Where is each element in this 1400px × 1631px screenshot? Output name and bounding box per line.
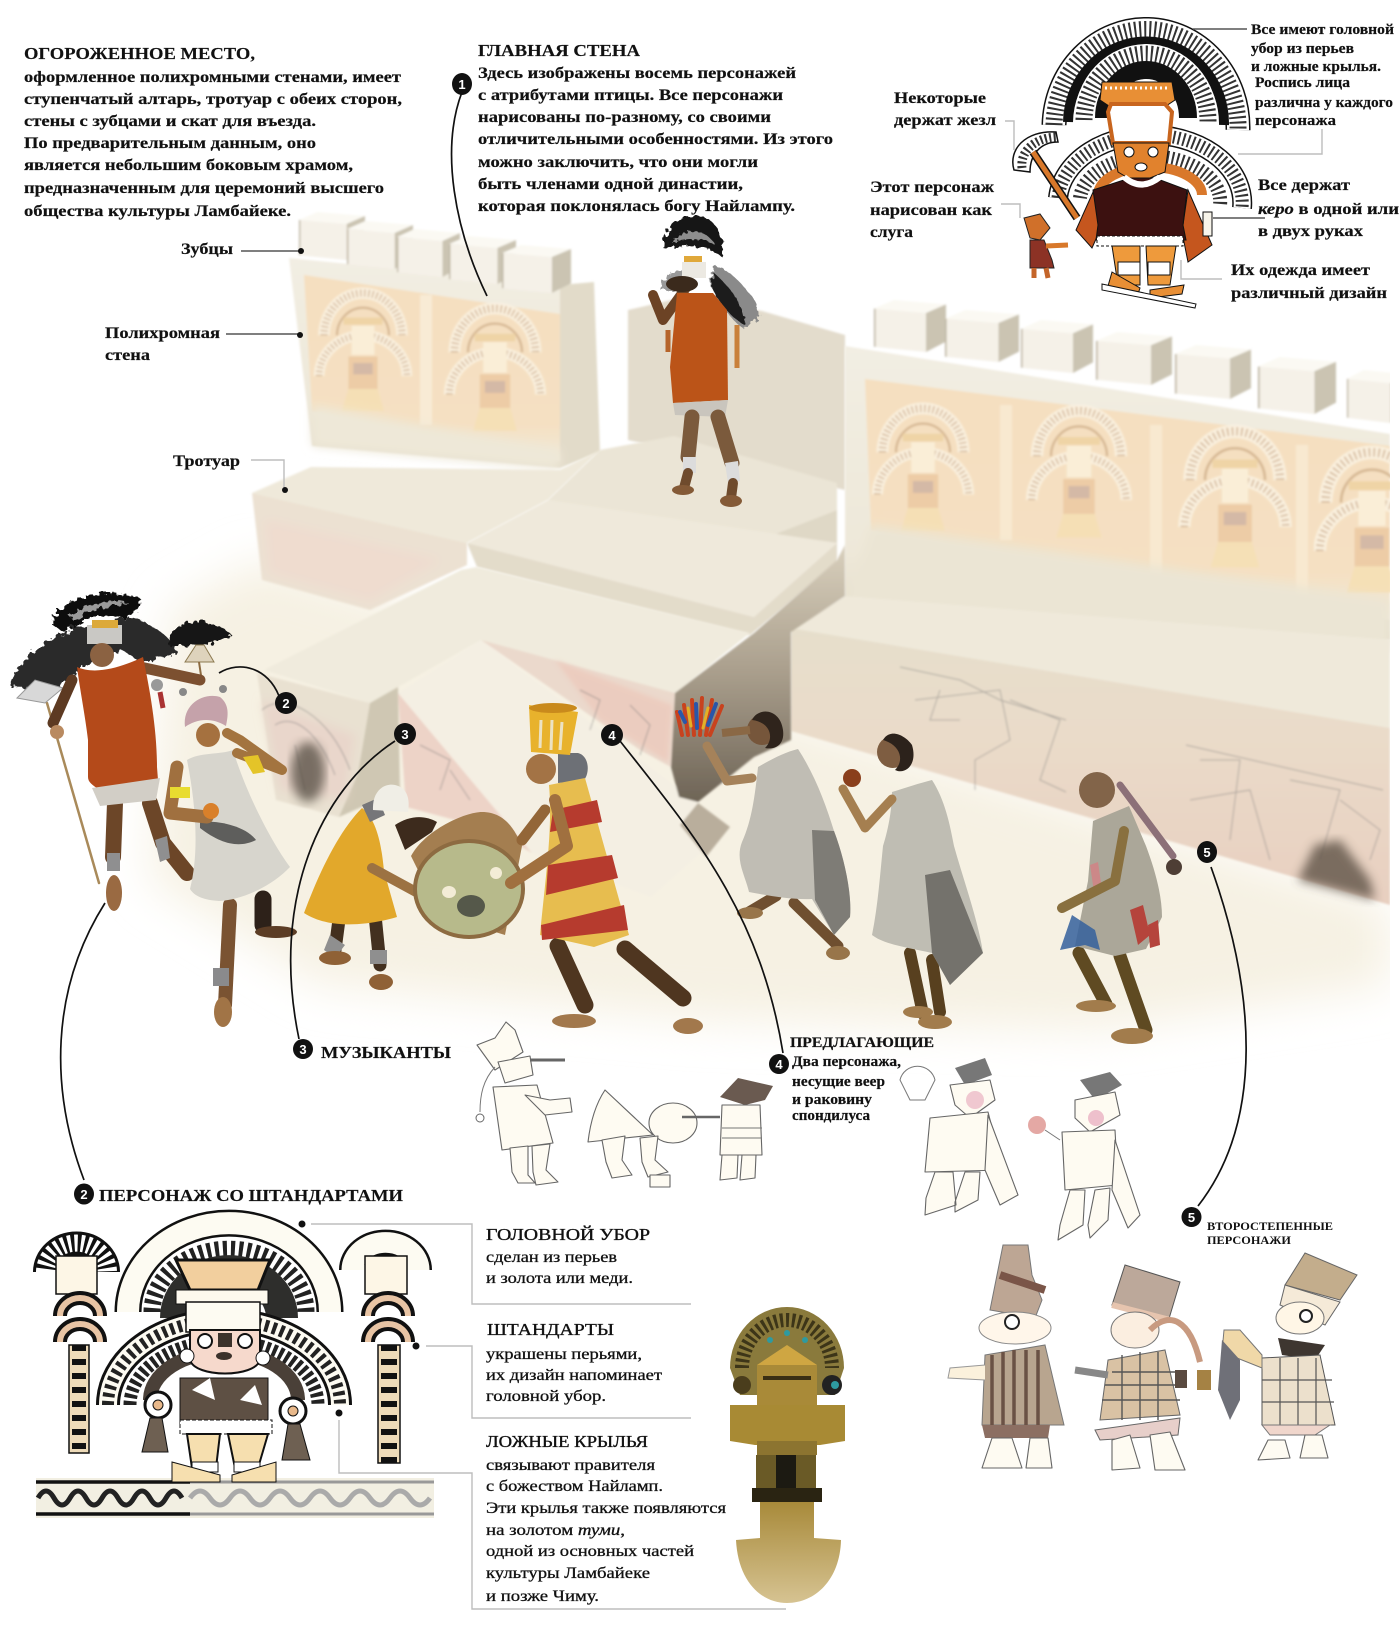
text block: enclosure description: оформленное полихромными стенами, имеет <box>24 69 401 86</box>
text: standards: украшены перьями, <box>486 1346 642 1363</box>
heading: secondary characters: ВТОРОСТЕПЕННЫЕ <box>1207 1221 1333 1233</box>
sketch: shell bearer <box>1028 1072 1140 1240</box>
label: kero note: керо в одной или <box>1258 201 1399 218</box>
label: clothing note: различный дизайн <box>1231 285 1387 302</box>
text block: enclosure description <box>24 44 402 220</box>
label: clothing note: Их одежда имеет <box>1231 262 1370 279</box>
left wall <box>289 212 600 470</box>
illustration: gold tumi <box>730 1307 845 1603</box>
badge 1 <box>452 73 472 95</box>
sketch: flute player <box>476 1022 572 1185</box>
text block: main wall: быть членами одной династии, <box>478 176 743 193</box>
label: servant note: слуга <box>870 224 913 241</box>
badge 5: 5 <box>1203 845 1211 860</box>
sketch: beard figure <box>1218 1253 1357 1460</box>
sketches: secondary characters <box>948 1245 1357 1470</box>
left standard <box>47 1246 106 1453</box>
callout arc 3 <box>291 741 395 1039</box>
heading: secondary characters: 5 <box>1188 1210 1195 1225</box>
text block: enclosure description: общества культуры Ламбайеке. <box>24 203 291 220</box>
text: false wings: культуры Ламбайеке <box>486 1565 650 1582</box>
badge 1: 1 <box>458 77 466 92</box>
text block: enclosure description: По предварительным данным, оно <box>24 135 316 152</box>
figure: shell bearer <box>843 734 983 1029</box>
label: merlons: Зубцы <box>181 241 234 258</box>
text block: offerers: спондилуса <box>792 1108 871 1124</box>
heading: musicians <box>293 1039 451 1062</box>
right wall <box>845 300 1400 650</box>
label: headdress note: различна у каждого <box>1255 95 1393 111</box>
label: headdress note: убор из перьев <box>1251 41 1354 57</box>
ground <box>150 560 1390 1030</box>
text block: main wall: нарисованы по-разному, со своими <box>478 109 771 126</box>
scene: temple enclosure <box>10 92 1400 1206</box>
text: standards <box>486 1320 662 1405</box>
text block: main wall: можно заключить, что они могли <box>478 154 758 171</box>
text block: enclosure description: ступенчатый алтарь, тротуар с обеих сторон, <box>24 91 402 108</box>
text block: offerers: несущие веер <box>792 1074 885 1090</box>
leaders for mural <box>298 1220 786 1609</box>
label: staff note <box>894 90 996 129</box>
ramp left pink face <box>398 693 532 853</box>
label: merlons <box>181 241 304 258</box>
altar steps <box>467 436 837 635</box>
text: standards: головной убор. <box>486 1388 606 1405</box>
illustration: top lord figure <box>1013 29 1242 308</box>
label: staff note: держат жезл <box>894 112 996 129</box>
text block: offerers: ПРЕДЛАГАЮЩИЕ <box>790 1035 934 1051</box>
text block: enclosure description: предназначенным для церемоний высшего <box>24 180 384 197</box>
text: headdress: сделан из перьев <box>486 1249 617 1266</box>
platform right side in shadow <box>671 545 845 802</box>
figure: standard bearer <box>10 593 232 911</box>
text block: main wall: ГЛАВНАЯ СТЕНА <box>478 41 641 60</box>
right standard <box>353 1244 418 1463</box>
text: false wings: связывают правителя <box>486 1457 655 1474</box>
text block: enclosure description: ОГОРОЖЕННОЕ МЕСТО, <box>24 44 255 63</box>
text: false wings: Эти крылья также появляются <box>486 1500 726 1517</box>
legs and feet <box>1102 246 1196 308</box>
heading: musicians: 3 <box>299 1042 307 1057</box>
label: servant note <box>870 179 994 241</box>
text: false wings: на золотом туми , <box>486 1522 625 1539</box>
badge 2: 2 <box>282 696 290 711</box>
text: false wings <box>486 1432 726 1605</box>
text block: enclosure description: является небольшим боковым храмом, <box>24 157 353 174</box>
text block: main wall: Здесь изображены восемь персонажей <box>478 65 796 82</box>
text block: enclosure description: стены с зубцами и скат для въезда. <box>24 113 316 130</box>
text: false wings: одной из основных частей <box>486 1543 694 1560</box>
badge 4: 4 <box>608 728 616 743</box>
back wall <box>628 298 845 490</box>
ramp surface <box>398 640 730 897</box>
sketches: musicians <box>476 1022 773 1187</box>
callout arc standard bearer <box>61 903 105 1180</box>
margin mask right <box>1390 300 1400 1100</box>
text: headdress <box>486 1225 650 1287</box>
sketches: offerers <box>900 1058 1140 1240</box>
text block: offerers <box>769 1035 934 1124</box>
bench right <box>791 596 1390 905</box>
label: clothing note <box>1231 262 1387 302</box>
sketch: fan bearer <box>900 1058 1018 1215</box>
label: polychrome wall: Полихромная <box>105 325 220 342</box>
staff and crest <box>1013 132 1077 218</box>
sketch: drummer <box>588 1090 697 1187</box>
upper headdress <box>1054 29 1238 130</box>
body <box>142 1378 310 1482</box>
text: false wings: с божеством Найламп. <box>486 1478 663 1495</box>
figure: white dress musician <box>170 685 297 1027</box>
text: false wings: ЛОЖНЫЕ КРЫЛЬЯ <box>486 1432 648 1451</box>
text: standards: ШТАНДАРТЫ <box>487 1320 614 1339</box>
label: sidewalk <box>173 453 288 493</box>
text block: offerers: 4 <box>775 1057 783 1072</box>
text block: main wall <box>478 41 833 215</box>
label: servant note: Этот персонаж <box>870 179 994 196</box>
heading: secondary characters <box>1182 1207 1333 1247</box>
figure: secondary character <box>1060 772 1182 1044</box>
text: headdress: и золота или меди. <box>486 1270 633 1287</box>
badge 4 <box>601 724 623 746</box>
face <box>1113 143 1169 178</box>
figure: drum <box>411 812 523 937</box>
figure: striped tunic musician <box>511 703 703 1034</box>
right pillar pink face <box>481 640 675 767</box>
leaders for top figure <box>1001 29 1322 279</box>
label: sidewalk: Тротуар <box>173 453 240 470</box>
heading: musicians: МУЗЫКАНТЫ <box>321 1043 451 1062</box>
text block: main wall: с атрибутами птицы. Все персонажи <box>478 87 783 104</box>
callout arc 2 <box>219 667 279 696</box>
text block: offerers: и раковину <box>792 1092 873 1108</box>
sketch: striped musician <box>682 1078 773 1180</box>
badge 5 <box>1197 841 1217 863</box>
label: kero note <box>1258 177 1399 240</box>
ground band <box>36 1478 434 1518</box>
label: kero note: Все держат <box>1258 177 1350 194</box>
illustration: standard bearer mural <box>36 1223 434 1518</box>
label: kero note: в двух руках <box>1258 223 1363 240</box>
figure: fan bearer <box>677 698 850 960</box>
text block: main wall: отличительными особенностями. Из этого <box>478 131 833 148</box>
badge 2 <box>275 692 297 714</box>
sketch: striped tunic <box>948 1245 1064 1468</box>
crest and headband <box>1100 82 1175 110</box>
label: polychrome wall: стена <box>105 347 150 364</box>
label: headdress note <box>1251 22 1394 129</box>
text: headdress: ГОЛОВНОЙ УБОР <box>486 1225 650 1244</box>
text block: main wall: которая поклонялась богу Найлампу. <box>478 198 795 215</box>
badge 3 <box>394 723 416 745</box>
heading: standard bearer: ПЕРСОНАЖ СО ШТАНДАРТАМИ <box>99 1186 403 1205</box>
label: headdress note: персонажа <box>1255 113 1337 129</box>
callout arc 5 <box>1198 867 1246 1206</box>
illustration: servant <box>1024 214 1068 278</box>
figure: drummer in yellow <box>304 785 440 990</box>
label: headdress note: Все имеют головной <box>1251 22 1394 38</box>
main headdress <box>108 1223 340 1405</box>
label: polychrome wall <box>105 325 303 364</box>
tunic <box>1076 177 1212 262</box>
callout arc 4 <box>620 741 783 1053</box>
text: false wings: и позже Чиму. <box>486 1588 599 1605</box>
sidewalk left <box>252 450 600 610</box>
callout arc 1 <box>452 92 487 296</box>
ramp shadow <box>680 803 730 857</box>
heading: secondary characters: ПЕРСОНАЖИ <box>1207 1235 1291 1247</box>
text: standards: их дизайн напоминает <box>486 1367 662 1384</box>
face <box>180 1330 270 1374</box>
text block: offerers: Два персонажа, <box>792 1054 901 1070</box>
lower wings <box>1058 135 1242 208</box>
figure: central man on top step <box>653 216 760 507</box>
heading: standard bearer: 2 <box>80 1187 88 1202</box>
label: headdress note: Роспись лица <box>1255 75 1351 91</box>
label: headdress note: и ложные крылья. <box>1251 59 1381 75</box>
altar platform and ramp <box>257 545 845 897</box>
label: servant note: нарисован как <box>870 202 993 219</box>
sketch: checked tunic <box>1075 1265 1211 1470</box>
left block faces <box>257 673 370 817</box>
label: staff note: Некоторые <box>894 90 986 107</box>
badge 3: 3 <box>401 727 409 742</box>
